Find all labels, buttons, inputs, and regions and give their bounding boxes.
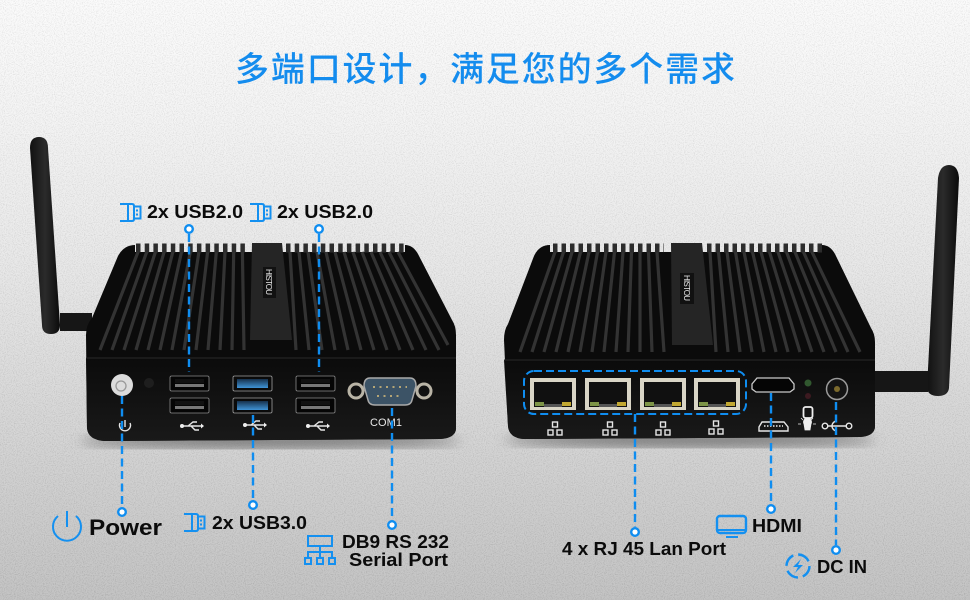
label: 4 x RJ 45 Lan Port	[562, 539, 726, 559]
HDMI port	[752, 378, 794, 392]
label: DC IN	[817, 557, 867, 577]
port symbols	[120, 420, 330, 431]
callout: USB 2.0 right	[250, 202, 373, 372]
right device: rear of mini PC	[504, 165, 959, 447]
COM port	[349, 378, 431, 405]
monitor icon	[717, 516, 746, 537]
label: 2x USB2.0	[277, 202, 373, 222]
chassis	[504, 245, 875, 439]
callout: USB 2.0 left	[120, 202, 243, 372]
logo	[263, 267, 276, 298]
logo: HISTOU	[264, 269, 273, 295]
callout: USB 3.0	[184, 415, 307, 533]
DC icon	[786, 554, 810, 578]
label: 2x USB2.0	[147, 202, 243, 222]
callout: serial port: Serial Port	[349, 550, 448, 570]
label: 2x USB3.0	[212, 513, 307, 533]
LAN ports	[530, 378, 740, 410]
USB icon	[250, 204, 270, 221]
shadow	[505, 433, 875, 447]
callout: Power	[53, 396, 162, 541]
label: HDMI	[752, 516, 802, 536]
antenna	[30, 137, 92, 334]
callout: serial port	[305, 408, 449, 570]
left device: front of mini PC	[30, 137, 460, 448]
label: Power	[89, 515, 162, 540]
top band	[250, 243, 292, 340]
power button	[111, 374, 133, 396]
antenna	[875, 165, 959, 396]
top band	[671, 243, 713, 345]
USB icon	[120, 204, 140, 221]
USB 2.0 ports column 1	[170, 376, 209, 413]
LED	[144, 378, 154, 388]
logo: HISTOU	[682, 275, 691, 301]
callout: DC IN	[786, 402, 867, 578]
status LEDs	[804, 380, 812, 399]
port symbols	[548, 407, 852, 435]
callout: HDMI	[717, 393, 802, 537]
USB icon	[184, 514, 204, 531]
network icon	[305, 536, 335, 564]
title: 多端口设计，满足您的多个需求	[235, 42, 735, 91]
chassis	[86, 245, 456, 441]
label: DB9 RS 232	[342, 532, 449, 552]
DC jack	[826, 378, 848, 400]
heat sink fins	[100, 252, 448, 350]
power icon	[53, 511, 81, 541]
shadow	[80, 434, 460, 448]
heat sink fins	[520, 252, 860, 352]
COM1 label: COM1	[370, 417, 402, 429]
callout: LAN ports	[524, 371, 746, 559]
USB 3.0 ports	[233, 376, 272, 413]
logo	[680, 273, 694, 304]
USB 2.0 ports column 2	[296, 376, 335, 413]
